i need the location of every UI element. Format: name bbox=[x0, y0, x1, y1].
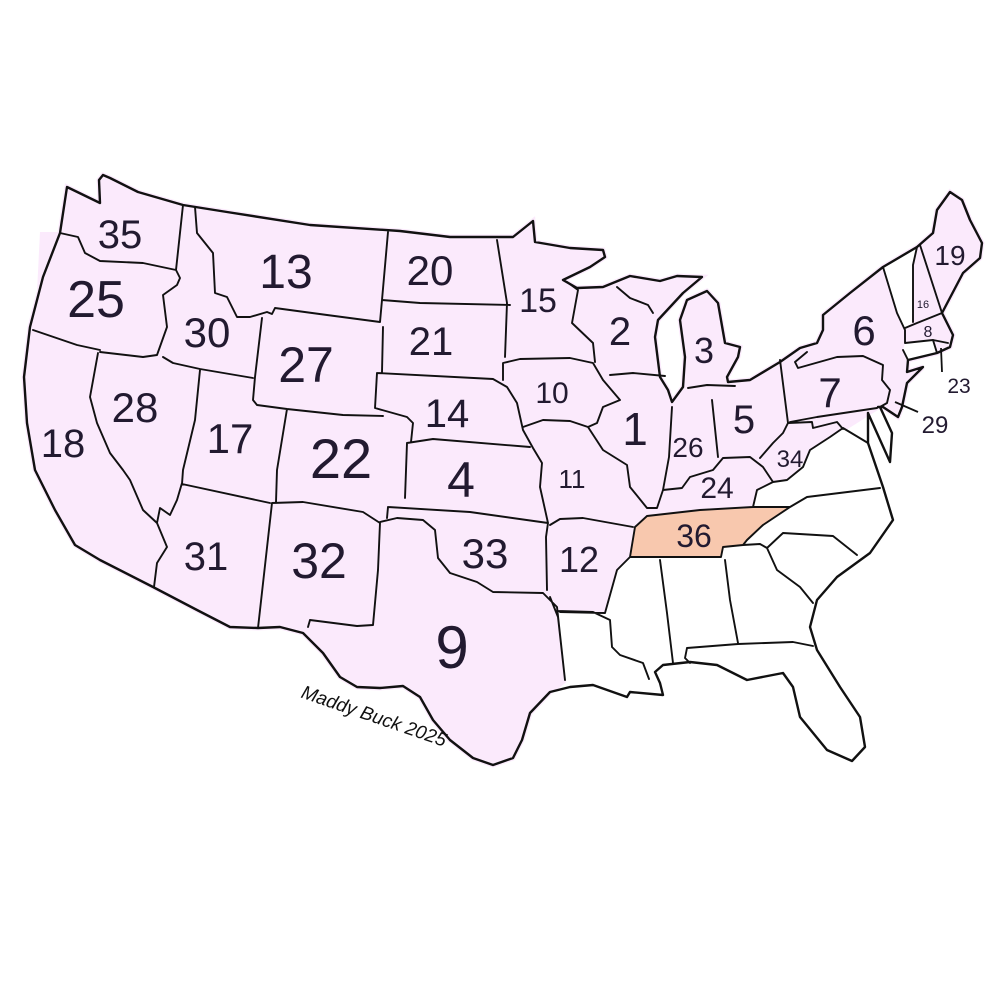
state rank numbers: 12 bbox=[559, 539, 599, 580]
state rank numbers: 21 bbox=[409, 320, 453, 364]
state rank numbers: 25 bbox=[67, 271, 125, 329]
state rank numbers bbox=[41, 213, 971, 681]
state rank numbers: 4 bbox=[447, 452, 475, 508]
state rank numbers: 26 bbox=[672, 432, 704, 463]
state rank numbers: 9 bbox=[435, 614, 469, 681]
state rank numbers: 30 bbox=[184, 309, 230, 356]
leader line for 23 bbox=[941, 348, 942, 372]
leader line for 29 bbox=[895, 402, 918, 412]
state rank numbers: 22 bbox=[310, 427, 372, 490]
state rank numbers: 3 bbox=[694, 330, 714, 371]
state rank numbers: 19 bbox=[934, 240, 966, 271]
state rank numbers: 17 bbox=[207, 415, 253, 462]
state rank numbers: 18 bbox=[41, 422, 85, 466]
state rank numbers: 33 bbox=[462, 530, 508, 577]
artist signature: Maddy Buck 2025 bbox=[298, 682, 450, 752]
state rank numbers: 27 bbox=[278, 337, 334, 393]
state rank numbers: 6 bbox=[852, 307, 876, 354]
state rank numbers: 8 bbox=[924, 324, 933, 341]
state rank numbers: 36 bbox=[676, 518, 712, 554]
state rank numbers: 11 bbox=[558, 464, 586, 494]
state rank numbers: 7 bbox=[818, 369, 842, 416]
state rank numbers: 32 bbox=[291, 533, 347, 589]
state rank numbers: 10 bbox=[535, 377, 569, 410]
state rank numbers: 16 bbox=[917, 299, 929, 311]
state rank numbers: 15 bbox=[519, 282, 557, 320]
state rank numbers: 34 bbox=[777, 446, 803, 473]
state rank numbers: 14 bbox=[425, 392, 469, 436]
state rank numbers: 1 bbox=[622, 403, 648, 455]
state rank numbers: 35 bbox=[98, 213, 142, 257]
state rank numbers: 23 bbox=[947, 375, 971, 398]
state rank numbers: 31 bbox=[184, 535, 228, 579]
state rank numbers: 5 bbox=[733, 398, 755, 442]
state rank numbers: 20 bbox=[407, 247, 453, 294]
unranked Vermont and Connecticut bbox=[883, 247, 937, 360]
country outline bbox=[24, 175, 982, 765]
pink filled country shape bbox=[24, 175, 982, 765]
state borders bbox=[33, 205, 948, 680]
state rank numbers: 28 bbox=[112, 384, 158, 431]
highlighted state: Tennessee bbox=[630, 507, 790, 557]
pink wash beyond the west coast bbox=[37, 232, 62, 292]
state rank numbers: 29 bbox=[922, 412, 948, 439]
state rank numbers: 13 bbox=[259, 246, 313, 299]
state rank numbers: 24 bbox=[700, 472, 734, 505]
unranked white southeastern states bbox=[558, 428, 893, 761]
state rank numbers: 2 bbox=[609, 310, 631, 354]
